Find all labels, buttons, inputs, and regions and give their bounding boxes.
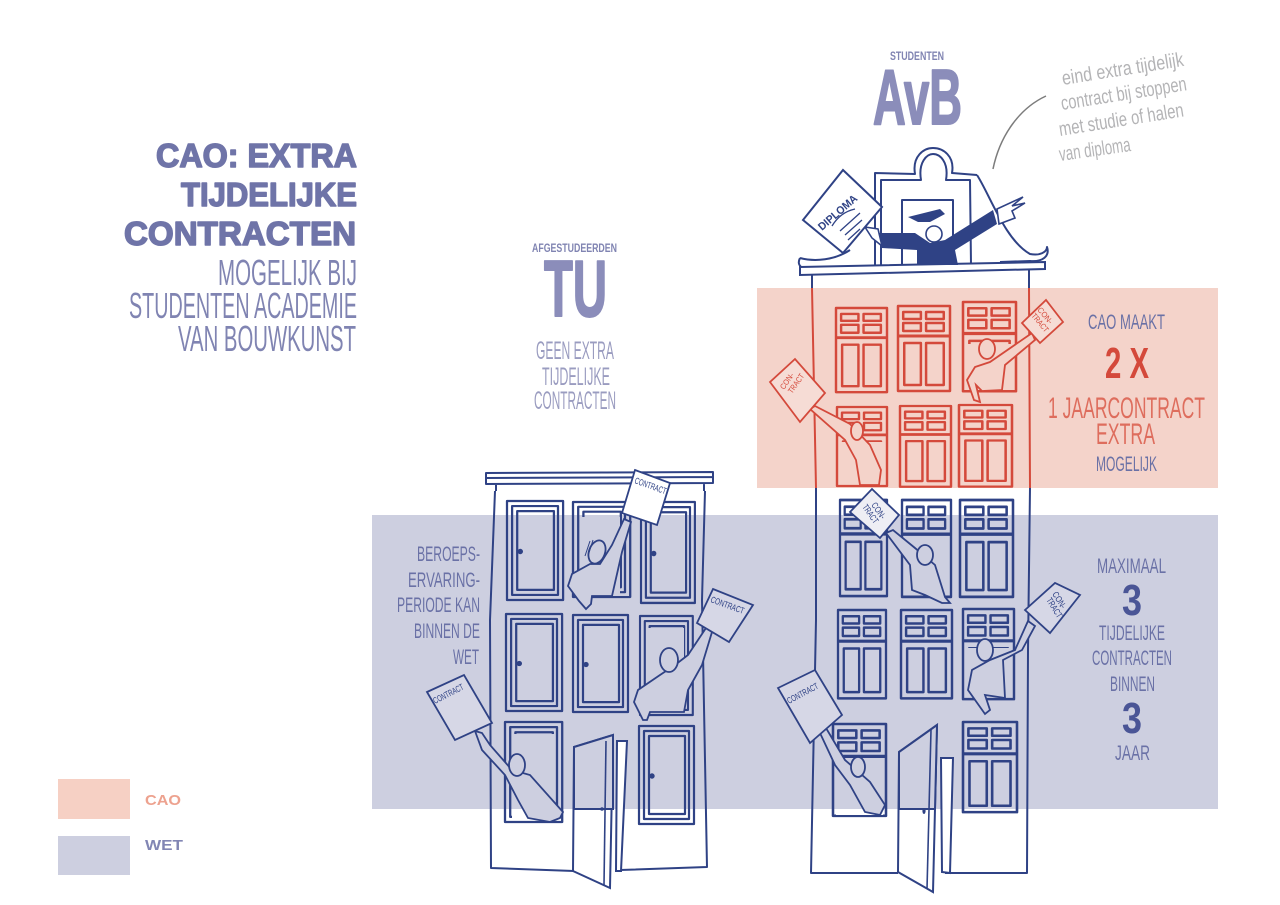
contract — [770, 359, 825, 422]
text: beroepservaring: PERIODE KAN — [397, 594, 480, 617]
legend — [58, 779, 183, 875]
text: GEEN EXTRA — [536, 337, 614, 365]
text: maximaal 3: TIJDELIJKE — [1099, 622, 1165, 645]
contract — [1025, 583, 1080, 633]
TU door — [573, 735, 627, 888]
subtitle: VAN BOUWKUNST — [178, 318, 356, 359]
text: maximaal 3: 3 — [1122, 694, 1142, 743]
arrow: note curve — [993, 96, 1046, 169]
text: maximaal 3: MAXIMAAL — [1097, 555, 1166, 578]
contract — [427, 675, 492, 740]
subtitle — [129, 252, 357, 359]
text: CAO maakt 2x: EXTRA — [1096, 418, 1155, 451]
contract: CONTRACT — [633, 475, 668, 496]
text: maximaal 3: 3 — [1122, 576, 1142, 625]
text: beroepservaring: BINNEN DE — [414, 620, 480, 643]
text: CAO maakt 2x: CAO MAAKT — [1088, 311, 1165, 334]
AvB door — [898, 725, 953, 892]
diploma — [803, 170, 882, 253]
title: CAO: EXTRA — [156, 137, 357, 174]
diploma: DIPLOMA — [816, 193, 860, 233]
band: WET — [372, 515, 1218, 809]
note: diploma: eind extra tijdelijk — [1060, 49, 1186, 90]
building: TU — [486, 472, 713, 888]
text: maximaal 3: CONTRACTEN — [1092, 647, 1172, 670]
TU cornice — [486, 472, 713, 491]
contract — [778, 670, 842, 743]
AvB walls — [811, 270, 1030, 873]
subtitle: STUDENTEN ACADEMIE — [129, 285, 357, 326]
AvB windows blue — [833, 500, 1017, 816]
contract: CON- — [1050, 590, 1068, 610]
figure: AvB row 5 with contract — [778, 670, 885, 815]
text: CAO maakt 2x: 2 X — [1105, 339, 1149, 388]
figure: graduate with diploma — [803, 170, 1025, 265]
contract: CONTRACT — [709, 594, 746, 616]
note: diploma: contract bij stoppen — [1059, 73, 1188, 115]
AvB open window interiors — [836, 344, 1012, 815]
text: beroepservaring: BEROEPS- — [417, 543, 480, 566]
AvB windows red — [836, 302, 1016, 487]
title: CONTRACTEN — [124, 215, 356, 252]
title — [124, 137, 357, 252]
contract: CON- — [1035, 306, 1055, 326]
gable — [799, 148, 1048, 275]
building: AvB — [799, 148, 1048, 892]
heading: AvB: AvB — [873, 53, 962, 141]
legend: CAO: CAO — [145, 792, 181, 809]
heading: TU — [532, 241, 617, 333]
contract: CON- — [869, 500, 888, 521]
figure: TU top with contract — [568, 470, 670, 609]
contract — [850, 489, 899, 538]
heading: AvB — [873, 49, 962, 141]
text: geen extra tijdelijke contracten: TIJDELIJKE — [542, 363, 610, 391]
text: CAO maakt 2x — [1048, 311, 1205, 476]
text: geen extra tijdelijke contracten — [534, 337, 616, 415]
note: diploma: van diploma — [1058, 134, 1133, 166]
subtitle: MOGELIJK BIJ — [218, 252, 357, 293]
figure: AvB row 3 with contract — [850, 489, 950, 603]
contract: TRACT — [1044, 596, 1065, 620]
heading: TU: AFGESTUDEERDEN — [532, 241, 617, 255]
legend: WET: WET — [145, 837, 183, 854]
TU windows — [505, 501, 695, 824]
text: beroepservaring: WET — [453, 646, 479, 669]
contract: TRACT — [1029, 312, 1051, 334]
text: maximaal 3: BINNEN — [1110, 673, 1155, 696]
TU open window interiors — [512, 517, 684, 819]
band: CAO — [757, 288, 1218, 488]
figure: TU bottom with contract — [427, 675, 563, 822]
contract: CONTRACT — [785, 681, 820, 706]
text: CONTRACTEN — [534, 387, 616, 415]
heading: AvB: STUDENTEN — [890, 49, 944, 63]
title: TIJDELIJKE — [181, 176, 357, 213]
text: maximaal 3 — [1092, 555, 1172, 765]
note: diploma — [1057, 49, 1188, 166]
contract — [1022, 300, 1063, 343]
contract: TRACT — [860, 502, 881, 526]
note: diploma: met studie of halen — [1057, 99, 1185, 141]
contract: CONTRACT — [431, 682, 466, 706]
text: beroepservaring — [397, 543, 480, 669]
heading: TU: TU — [544, 244, 607, 333]
figure: TU middle with contract — [634, 589, 753, 720]
figure: AvB red left with contract — [770, 359, 881, 485]
figure: AvB row 4 with contract — [968, 583, 1080, 714]
contract: TRACT — [786, 372, 806, 395]
text: CAO maakt 2x: MOGELIJK — [1096, 453, 1157, 476]
figure: AvB red top with contract — [967, 300, 1063, 402]
contract: CON- — [778, 371, 796, 391]
TU walls — [490, 491, 707, 871]
text: maximaal 3: JAAR — [1115, 742, 1150, 765]
text: beroepservaring: ERVARING- — [408, 569, 480, 592]
